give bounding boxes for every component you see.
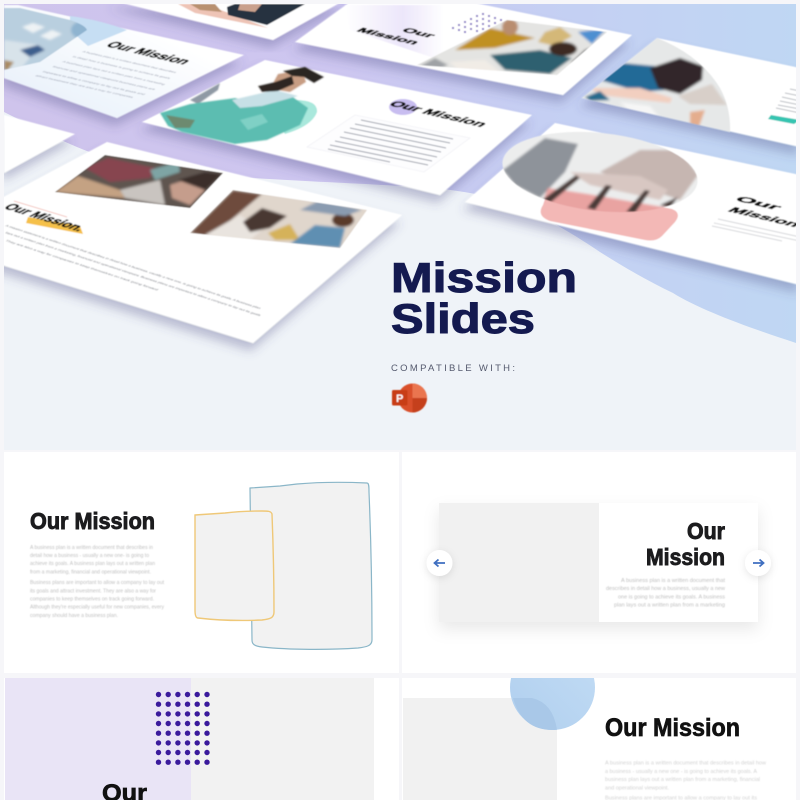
body text: and operational viewpoint. xyxy=(605,786,669,792)
panel: our mission carousel xyxy=(402,452,796,673)
photo: interior xyxy=(4,8,87,70)
photo: woman xyxy=(580,35,735,135)
body text: business plan lays out a written plan from a marketing, financial xyxy=(605,777,760,783)
body text: company should have a business plan. xyxy=(30,613,118,619)
hero slides group xyxy=(0,0,800,343)
body rows xyxy=(328,120,453,165)
small tag line xyxy=(14,201,67,217)
body rows: in detail how a business is going to achieve its goals xyxy=(71,56,172,79)
compatible label: COMPATIBLE WITH: xyxy=(391,363,515,374)
body text: plan lays out a written plan from a marketing xyxy=(614,602,725,608)
slide: top left xyxy=(0,5,244,118)
body rows xyxy=(712,219,800,241)
body text xyxy=(605,760,766,800)
light blue circle xyxy=(70,16,127,46)
photo: team with painting xyxy=(190,190,367,248)
heading: Our Mission xyxy=(30,508,155,534)
heading: Our Mission xyxy=(605,714,740,742)
body rows xyxy=(34,51,178,98)
slide: top centre xyxy=(110,0,345,40)
body text: A business plan is a written document that describes in xyxy=(30,545,153,551)
body rows: important to allow a company to lay out its goals and xyxy=(41,71,146,96)
photo: top centre slide xyxy=(178,4,305,28)
photo: team xyxy=(418,20,606,75)
photo: team around table xyxy=(54,154,224,208)
teal blob xyxy=(284,100,318,134)
body text: one is going to achieve its goals. A business xyxy=(618,594,725,600)
blue semicircle xyxy=(510,645,595,730)
heading xyxy=(646,518,725,570)
heading: Our Mission xyxy=(102,40,194,66)
icon: PowerPoint: P xyxy=(396,393,403,405)
hero title xyxy=(392,261,574,334)
heading: Our xyxy=(732,195,785,211)
slide: chair: Mission xyxy=(725,206,800,228)
yellow highlight xyxy=(26,217,83,234)
body text: Although they're especially useful for new companies, every xyxy=(30,604,164,610)
body text: its goals and attract investment. They are also a way for xyxy=(30,588,156,594)
slide: woman at desk xyxy=(580,35,800,147)
body text: a business - usually a new one - is going to achieve its goals. A xyxy=(605,769,757,775)
body rows: A business plan lays out a written plan from a marketing xyxy=(61,61,166,86)
slide: two photos, large xyxy=(0,142,402,343)
body text: achieve its goals. A business plan lays out a written plan xyxy=(30,561,155,567)
hero title: Slides xyxy=(391,295,535,342)
photo: chair xyxy=(502,132,698,212)
body text: detail how a business - usually a new one- is going to xyxy=(30,553,149,559)
slide: top centre right with team photo xyxy=(295,2,632,95)
body rows: A mission statement is a written document that describes in detail how a business, usually a new one, is going to achieve its goals. A business plan xyxy=(4,224,262,310)
dots pattern xyxy=(452,13,502,33)
icon: PowerPoint xyxy=(392,384,427,412)
slide: chair xyxy=(465,123,800,285)
heading: Our Mission. xyxy=(0,202,89,233)
teal button xyxy=(768,115,800,124)
body rows: lays out a written plan from a marketing, financial and operational viewpoint. Business plans are important to allow a company to lay out its goals xyxy=(4,231,262,317)
slide: left small xyxy=(4,115,75,173)
dot grid xyxy=(156,692,210,765)
body text: A business plan is a written document that xyxy=(621,578,726,584)
panel: our mission with blue semicircle xyxy=(402,645,796,800)
overlap of circle and placeholder xyxy=(513,698,557,730)
body text: Business plans are important to allow a company to lay out xyxy=(30,580,164,586)
icon: right arrow button xyxy=(745,550,771,576)
heading: Mission xyxy=(646,544,725,570)
heading with purple circle: Our Mission xyxy=(386,99,492,128)
body text: A business plan is a written document that describes in detail how xyxy=(605,760,766,766)
hero panel xyxy=(0,0,800,450)
image placeholder xyxy=(403,698,557,800)
purple to blue background wave xyxy=(4,4,796,343)
body rows: financial and operational viewpoint business plans are xyxy=(51,66,156,91)
panel: lavender with dots xyxy=(4,678,399,800)
icon: left arrow button xyxy=(426,550,452,576)
body text xyxy=(30,545,164,619)
heading: Our xyxy=(687,518,725,544)
body text: companies to keep themselves on track going forward. xyxy=(30,596,154,602)
body rows xyxy=(776,89,800,113)
body rows: A business plan is a written document that describes xyxy=(81,51,178,74)
photo: man xyxy=(160,67,324,144)
heading: Our xyxy=(399,27,438,39)
panel: our mission with sketched frames xyxy=(4,452,399,673)
body text: from a marketing, financial and operational viewpoint. xyxy=(30,570,151,576)
pink rounded shape xyxy=(540,199,678,241)
body rows: attract investment they are also a way for companies xyxy=(34,75,135,98)
slide: man in teal jacket xyxy=(142,60,532,195)
carousel card xyxy=(439,503,758,622)
slide: top centre right with team photo: Mission xyxy=(354,27,422,46)
hero title: Mission xyxy=(391,254,577,301)
body text xyxy=(606,578,726,608)
sketched frame: blue xyxy=(250,482,372,649)
sketched frame: orange xyxy=(195,511,274,620)
body rows: They are also a way for companies to keep themselves on track going forward xyxy=(4,239,160,291)
text card outline xyxy=(308,138,470,148)
body text: describes in detail how a business, usually a new xyxy=(606,586,725,592)
